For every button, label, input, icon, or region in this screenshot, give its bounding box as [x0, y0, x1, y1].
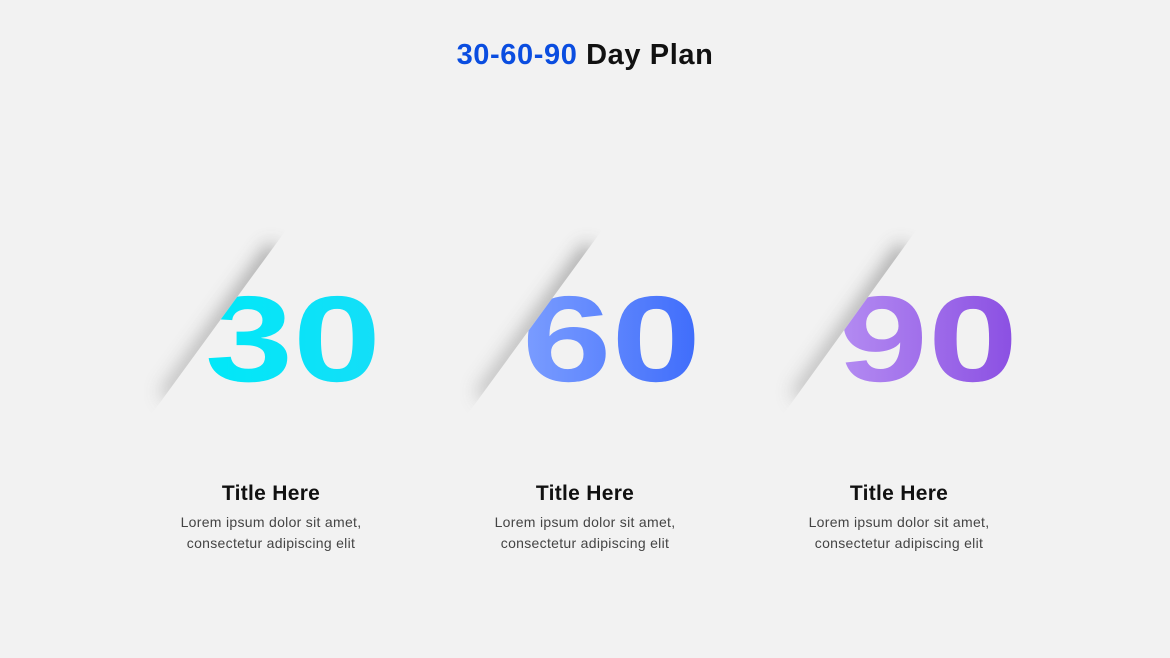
number 90: [798, 248, 1018, 407]
caption 3: consectetur adipiscing elit: [815, 535, 983, 551]
title: 30-60-90 Day Plan: [457, 39, 713, 71]
number 30: 30: [205, 271, 381, 407]
caption 1: consectetur adipiscing elit: [187, 535, 355, 551]
caption 3: Lorem ipsum dolor sit amet,: [809, 514, 989, 530]
caption 2: consectetur adipiscing elit: [501, 535, 669, 551]
caption 2: Lorem ipsum dolor sit amet,: [495, 514, 675, 530]
number 30: [166, 248, 381, 407]
caption 1: Lorem ipsum dolor sit amet,: [181, 514, 361, 530]
caption 2: [495, 482, 675, 551]
caption 1: Title Here: [222, 482, 320, 505]
caption 3: [809, 482, 989, 551]
caption 2: Title Here: [536, 482, 634, 505]
caption 3: Title Here: [850, 482, 948, 505]
number 60: [482, 248, 701, 407]
numbers graphic: [156, 237, 1012, 402]
number 60: 60: [522, 271, 701, 407]
number 90: 90: [838, 271, 1018, 407]
caption 1: [181, 482, 361, 551]
